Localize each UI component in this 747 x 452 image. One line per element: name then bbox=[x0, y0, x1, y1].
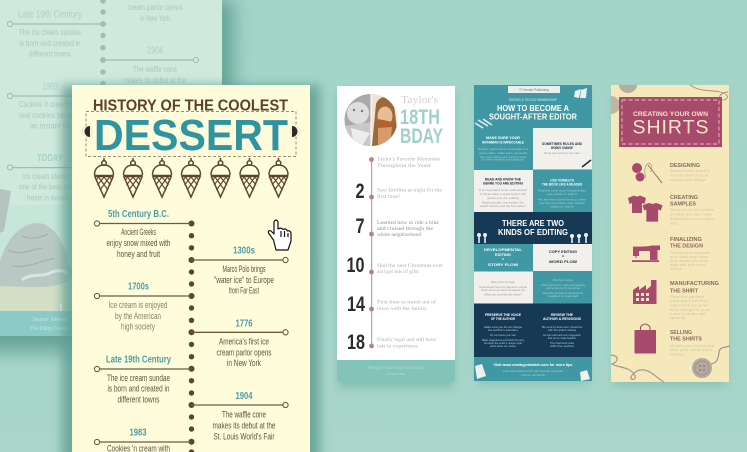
event: 1700s: high society bbox=[121, 322, 155, 332]
panel: preserve and review: PRESERVE THE VOICE bbox=[485, 313, 521, 317]
step: designing: that you want on your bbox=[670, 174, 709, 178]
step: selling the shirts bbox=[670, 330, 714, 356]
back panel timeline spine bbox=[10, 0, 196, 168]
step: finalizing the design: shirts bbox=[670, 267, 682, 271]
step: creating samples: on fabric and then make bbox=[670, 212, 712, 216]
step: selling the shirts: business bbox=[670, 352, 684, 356]
icon: factory bbox=[633, 280, 656, 304]
column: developmental editing: DEVELOPMENTAL bbox=[484, 248, 523, 252]
step: selling the shirts: start your online store bbox=[670, 348, 712, 352]
event: 1700s: 1700s bbox=[128, 280, 149, 292]
tip: read the genre: Read popular new books, the bbox=[482, 200, 525, 204]
event: 1700s bbox=[108, 280, 168, 332]
step: creating samples bbox=[670, 195, 715, 226]
title: 18TH bbox=[400, 106, 440, 129]
ages: 10 bbox=[346, 254, 364, 277]
icon: pencils bbox=[475, 119, 492, 128]
title bbox=[400, 95, 443, 148]
icon: open book bbox=[574, 88, 587, 98]
back panel text: 1983 bbox=[42, 82, 58, 92]
back panel text: Ice cream stands as bbox=[22, 171, 78, 181]
column: developmental editing: EDITING bbox=[495, 253, 511, 257]
step: manufacturing the shirt bbox=[670, 281, 719, 320]
step: finalizing the design: Finalize your samples bbox=[670, 251, 710, 255]
event: late 19th century bbox=[106, 354, 171, 404]
banner: two kinds of editing: THERE ARE TWO bbox=[502, 218, 564, 228]
tip: grammar: GRAMMAR IS IMPECCABLE bbox=[482, 140, 525, 144]
event: 1983: 1983 bbox=[130, 426, 147, 438]
column: developmental editing: STORY FLOW bbox=[488, 263, 518, 267]
step: manufacturing the shirt: MANUFACTURING bbox=[670, 281, 719, 287]
step: finalizing the design: that will suit your bbox=[670, 263, 707, 267]
back panel text: 1904 bbox=[147, 46, 163, 56]
milestone text: and cruised through the bbox=[377, 227, 434, 232]
tip: grammar: good editor, make sure you know bbox=[479, 151, 528, 155]
tip: rules change: WORDS CHANGE bbox=[551, 146, 574, 150]
panel: preserve and review: the author's intention bbox=[488, 328, 519, 332]
footer band: Celebrate bbox=[386, 372, 406, 376]
step: creating samples: Sketch or cut out a pattern bbox=[670, 208, 714, 212]
column: developmental editing bbox=[474, 248, 533, 304]
step: manufacturing the shirt: THE SHIRT bbox=[670, 288, 698, 294]
panel: preserve and review: AUTHOR & REVISIONS bbox=[543, 317, 581, 321]
tip: read the genre: It is important to be well-versed bbox=[479, 188, 528, 192]
timeline spine bbox=[188, 220, 194, 452]
panel: preserve and review: with the author closely bbox=[548, 328, 577, 332]
back panel text: makes its debut at the bbox=[124, 75, 186, 85]
event: 1300s: 1300s bbox=[233, 244, 255, 256]
back panel text: cream parlor opens bbox=[128, 2, 182, 12]
banner: two kinds of editing: KINDS OF EDITING bbox=[498, 227, 568, 237]
title: BDAY bbox=[400, 125, 443, 148]
tip: lose yourself bbox=[538, 178, 587, 208]
tip: rules change: SOMETIMES RULES AND bbox=[542, 142, 583, 146]
event: 1300s: "water ice" to Europe bbox=[214, 275, 274, 285]
tip: lose yourself: Read the book once through before bbox=[538, 188, 586, 192]
tip: grammar: MAKE SURE YOUR bbox=[486, 136, 521, 140]
photo: baby and grown-up portrait bbox=[344, 94, 398, 146]
title: EDITING & TEXTILE MEMBERSHIP bbox=[509, 98, 558, 102]
column: copy editing: How the sentence structures fit bbox=[543, 291, 583, 295]
back panel text: an instant hit bbox=[30, 120, 70, 130]
step: selling the shirts: Market your product and bbox=[670, 344, 714, 348]
milestone text: Had the best Christmas ever bbox=[377, 264, 443, 269]
title banner: SHIRTS bbox=[632, 116, 708, 138]
ages: 14 bbox=[347, 293, 365, 316]
icon: t-shirts bbox=[628, 196, 663, 222]
back panel footer band bbox=[0, 311, 72, 336]
step: manufacturing the shirt: can produce your bbox=[670, 304, 709, 308]
step: finalizing the design bbox=[670, 237, 710, 271]
tip: read the genre: award winners and the best sellers bbox=[480, 204, 527, 208]
column: copy editing: = bbox=[562, 254, 565, 258]
event: 1776: 1776 bbox=[236, 318, 253, 330]
footer: Visit www.readbyprintable.com for more tips bbox=[494, 363, 572, 367]
tip: grammar: the rules before you correct work bbox=[480, 155, 527, 159]
icon: shopping bag bbox=[634, 324, 656, 354]
step: finalizing the design: final tweaks you need bbox=[670, 259, 708, 263]
tip: lose yourself: THE BOOK LIKE A READER bbox=[542, 182, 582, 186]
tip: lose yourself: starts to wane bbox=[550, 204, 575, 208]
back panel text: Cookies 'n cream with bbox=[19, 99, 81, 109]
header pill bbox=[508, 86, 560, 93]
column: copy editing: WORD FLOW bbox=[549, 260, 577, 264]
step: manufacturing the shirt: exact quantity and bbox=[670, 312, 706, 316]
step: designing: Sketch or plan what it is bbox=[670, 169, 710, 173]
back panel text: is born and created in bbox=[20, 38, 81, 48]
event: 1300s: from Far East bbox=[229, 286, 259, 296]
timeline connectors bbox=[94, 221, 288, 445]
heading: history of the coolest: HISTORY OF THE COOLEST bbox=[93, 98, 288, 114]
column: copy editing: Word flow is simple bbox=[553, 278, 573, 282]
panel: preserve and review: and tone of voice bbox=[490, 344, 517, 348]
event: 5th century: 5th Century B.C. bbox=[108, 208, 169, 220]
back panel text: one of the best-selling bbox=[19, 182, 81, 192]
back panel text bbox=[18, 2, 186, 202]
title frame bbox=[82, 112, 300, 156]
tip: grammar bbox=[478, 136, 529, 162]
panel: preserve and review: The final word rests bbox=[550, 341, 575, 345]
back panel text: different towns bbox=[29, 48, 71, 58]
tip: rules change: Never stop learning new rules bbox=[544, 151, 581, 155]
timeline bbox=[369, 157, 374, 348]
event: 1776: in New York bbox=[227, 358, 261, 368]
event: 1904: St. Louis World's Fair bbox=[214, 432, 275, 442]
title banner: CREATING YOUR OWN bbox=[633, 112, 708, 118]
back panel text: Late 19th Century bbox=[18, 10, 82, 20]
icon: sewing machine bbox=[632, 246, 660, 262]
column: developmental editing: work, and how each character fits bbox=[481, 288, 526, 292]
column: copy editing: together to read well bbox=[548, 294, 578, 298]
panel: preserve and review: with the author bbox=[550, 344, 574, 348]
milestone text bbox=[377, 158, 443, 350]
event: late 19th century: is born and created in bbox=[108, 384, 170, 394]
milestone text: town with the family bbox=[377, 307, 428, 312]
milestone text: Throughout the Years bbox=[377, 164, 431, 169]
column: copy editing: Check grammar, style and spelling bbox=[541, 283, 585, 287]
banner: two kinds of editing bbox=[474, 212, 592, 244]
event: 5th century: Ancient Greeks bbox=[121, 227, 156, 237]
event: late 19th century: The ice cream sundae bbox=[107, 373, 170, 383]
title: SOUGHT-AFTER EDITOR bbox=[489, 112, 577, 122]
step: manufacturing the shirt: final design to your bbox=[670, 308, 711, 312]
tip: read the genre: in what makes a good book in the bbox=[480, 192, 526, 196]
tip: rules change bbox=[533, 128, 592, 170]
column: copy editing: COPY EDITING bbox=[549, 250, 577, 254]
column: developmental editing: Understand how the narrative should bbox=[479, 285, 527, 289]
panel: Taylor's 18th birthday bbox=[337, 86, 455, 388]
tip: lose yourself: you start to edit it bbox=[547, 192, 577, 196]
panel: preserve and review bbox=[474, 304, 592, 357]
column: developmental editing: = bbox=[502, 258, 505, 262]
event: 1300s: Marco Polo brings bbox=[222, 264, 266, 274]
tip: grammar: of other writers and authors bbox=[482, 158, 525, 162]
tip: lose yourself: Pay attention to how the story makes bbox=[538, 198, 587, 202]
step: designing: custom shirt design bbox=[670, 178, 706, 182]
event: 1300s bbox=[214, 244, 274, 296]
tip: read the genre: GENRE YOU ARE EDITING bbox=[483, 182, 523, 186]
decorative spool button and thread at bottom bbox=[611, 346, 730, 382]
panel: preserve and review: Do not impose your own bbox=[490, 333, 516, 337]
event: 5th century: honey and fruit bbox=[117, 249, 160, 259]
back panel text: The waffle cone bbox=[133, 64, 177, 74]
step: creating samples: size bbox=[670, 222, 678, 226]
panel: preserve and review: OF THE AUTHOR bbox=[491, 317, 516, 321]
ages: 7 bbox=[356, 215, 364, 238]
step: finalizing the design: THE DESIGN bbox=[670, 244, 703, 250]
milestone text: and got lots of gifts bbox=[377, 270, 419, 275]
milestone text: whole neighborhood bbox=[377, 233, 422, 238]
back panel footer band: The Dairy Council bbox=[30, 326, 70, 332]
back panel text: treats in America bbox=[27, 192, 73, 202]
tip: read the genre: genre you are editing bbox=[487, 196, 520, 200]
panel: creating your own shirts bbox=[611, 85, 730, 386]
milestone text: Learned how to ride a bike bbox=[377, 221, 440, 226]
milestone text: First time to travel out of bbox=[377, 300, 436, 306]
column: copy editing bbox=[533, 244, 592, 298]
decorative buttons and thread at top bbox=[611, 85, 728, 114]
title: HOW TO BECOME A bbox=[497, 103, 569, 113]
step: creating samples: SAMPLES bbox=[670, 202, 697, 208]
column: developmental editing: Story flow is made bbox=[491, 280, 515, 284]
event: 5th century: enjoy snow mixed with bbox=[106, 238, 171, 248]
header pill: © Female Publishing bbox=[519, 88, 549, 92]
event: late 19th century: Late 19th Century bbox=[106, 354, 171, 366]
footer band bbox=[337, 360, 455, 381]
milestone text: lots to experience bbox=[377, 344, 419, 350]
ages bbox=[346, 180, 365, 354]
event: 1904: The waffle cone bbox=[222, 410, 266, 420]
title banner bbox=[619, 97, 722, 147]
panel: faded back infographic bbox=[0, 0, 234, 352]
panel: preserve and review: Make suggestions and clarify the story bbox=[482, 338, 525, 342]
milestone text: Saw fireflies at night for the bbox=[377, 188, 443, 194]
panel: how to become a sought-after editor bbox=[474, 85, 592, 384]
panel: preserve and review: REVIEW THE bbox=[551, 313, 573, 317]
event: 1700s: Ice cream is enjoyed bbox=[108, 300, 168, 310]
footer: Learn about editing and find other resources and guides bbox=[503, 369, 564, 373]
step: designing: DESIGNING bbox=[670, 163, 700, 169]
event: 1983 bbox=[107, 426, 170, 452]
step: finalizing the design: FINALIZING bbox=[670, 237, 702, 243]
title: Taylor's bbox=[401, 95, 438, 106]
back panel text: in New York bbox=[140, 13, 170, 23]
panel: preserve and review: but keep the writer's unique style bbox=[484, 341, 522, 345]
milestone text: Finally legal and still have bbox=[377, 338, 437, 343]
footer band: Ring in the Big Birthday bbox=[368, 365, 425, 370]
step: selling the shirts: SELLING bbox=[670, 330, 692, 336]
heading: dessert: DESSERT bbox=[94, 111, 288, 160]
tip: grammar: Proper grammar is essential to a bbox=[478, 147, 529, 151]
ages: 18 bbox=[347, 331, 365, 354]
milestone text: first time! bbox=[377, 195, 400, 200]
step: designing bbox=[670, 163, 710, 182]
event: 1904: 1904 bbox=[236, 390, 253, 402]
back panel ice cream photo bbox=[0, 189, 70, 311]
ages: 2 bbox=[356, 180, 364, 203]
column: developmental editing: What can you help the writer? bbox=[484, 292, 522, 296]
footer: online anytime bbox=[521, 373, 546, 377]
event: 5th century bbox=[106, 208, 171, 259]
step: creating samples: CREATING bbox=[670, 195, 698, 201]
event: 1776: America's first ice bbox=[219, 336, 269, 346]
step: selling the shirts: THE SHIRTS bbox=[670, 336, 703, 342]
back panel text: The ice cream sundae bbox=[19, 27, 81, 37]
icons: row of ice cream cones bbox=[94, 158, 288, 197]
step: creating samples: and sew it to try on your bbox=[670, 217, 715, 221]
panel: preserve and review: Make sure you do not change bbox=[484, 325, 522, 329]
event: 1904: makes its debut at the bbox=[212, 420, 276, 430]
event: 1776: cream parlor opens bbox=[216, 348, 272, 358]
event: 1776 bbox=[216, 318, 272, 368]
back panel text: real cookies became bbox=[19, 110, 81, 120]
milestone text: Taylor's Favorite Memories bbox=[377, 158, 440, 162]
tip: read the genre: READ AND KNOW THE bbox=[485, 178, 522, 182]
column: copy editing: and sentence by sentence bbox=[546, 286, 580, 290]
back panel footer band: Source: Internet bbox=[32, 317, 68, 323]
panel: preserve and review: Go over each and every suggestion bbox=[543, 333, 581, 337]
step: finalizing the design: and make any other bbox=[670, 255, 709, 259]
step: manufacturing the shirt: quality bbox=[670, 316, 686, 320]
footer bbox=[475, 363, 590, 381]
step: manufacturing the shirt: manufacturer that bbox=[670, 299, 709, 303]
event: 1904 bbox=[212, 390, 276, 442]
panel: preserve and review: Be sure to look over revisions bbox=[542, 325, 583, 329]
tip: lose yourself: you feel and where your interest bbox=[539, 201, 585, 205]
panel: preserve and review: that you've made together bbox=[548, 336, 576, 340]
icon: pointer hand cursor bbox=[268, 220, 291, 250]
panel: history of dessert bbox=[62, 85, 320, 452]
tip: lose yourself: LOSE YOURSELF IN bbox=[550, 178, 574, 182]
icon: buttons and needle bbox=[632, 163, 662, 183]
event: 1700s: by the American bbox=[115, 311, 161, 321]
step: manufacturing the shirt: Find the perfect bbox=[670, 295, 705, 299]
title bbox=[489, 98, 577, 122]
back panel text: TODAY bbox=[37, 153, 63, 164]
tip: read the genre bbox=[474, 170, 533, 212]
event: late 19th century: different towns bbox=[118, 394, 160, 404]
